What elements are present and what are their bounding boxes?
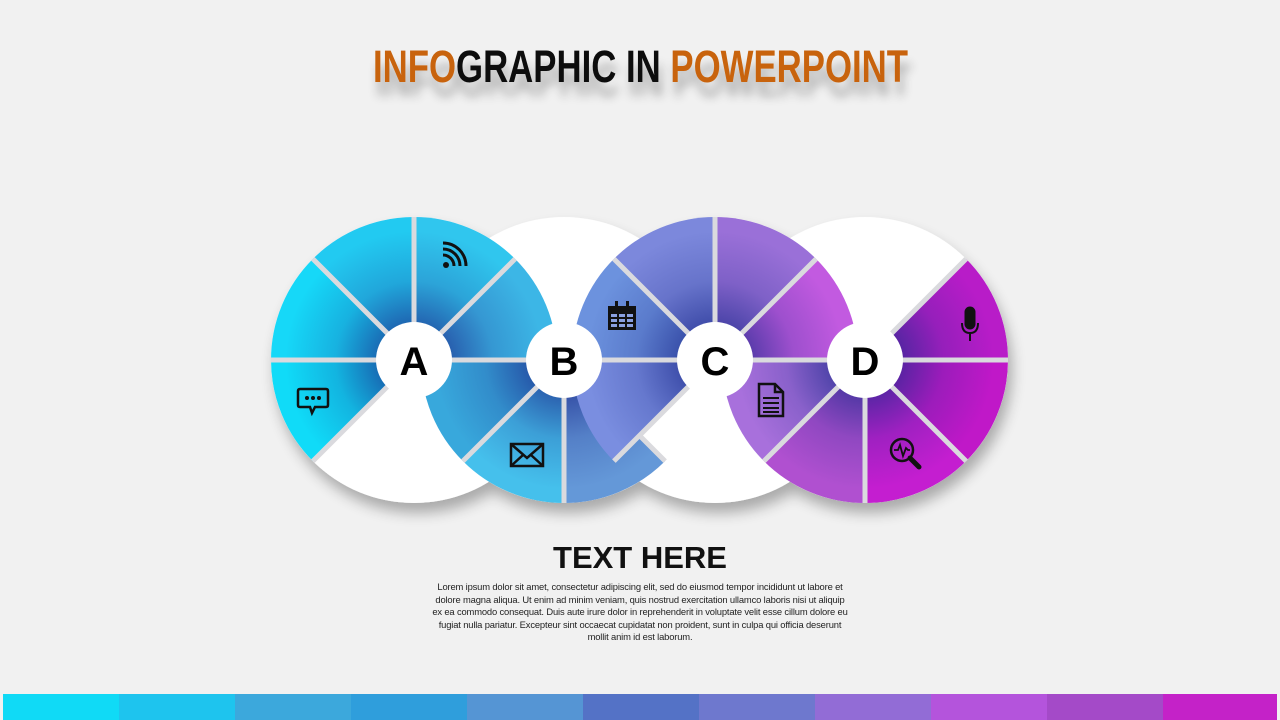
label A: A bbox=[400, 340, 428, 384]
circle C wedges bbox=[572, 217, 858, 461]
label D bbox=[827, 322, 903, 398]
title: INFOGRAPHIC IN POWERPOINT bbox=[373, 41, 908, 92]
label C bbox=[677, 322, 753, 398]
icon: calendar bbox=[608, 301, 636, 330]
icon: chat bbox=[298, 389, 328, 413]
icon: envelope bbox=[511, 444, 543, 466]
center labels bbox=[376, 322, 903, 398]
circle D wedges bbox=[722, 259, 1008, 503]
heading: text here: TEXT HERE bbox=[553, 540, 727, 575]
icon: search bbox=[891, 439, 919, 467]
icon: document bbox=[759, 384, 783, 416]
icon: microphone bbox=[962, 307, 978, 341]
icon: rss bbox=[443, 243, 466, 268]
body text: Lorem ipsum dolor sit amet, consectetur adipiscing elit, sed do eiusmod tempor incididunt ut labore et dolore magna aliqua. Ut enim ad minim veniam, quis nostrud exercitation ullamco laboris nisi ut aliquip ex ea commodo consequat. Duis aute irure dolor in reprehenderit in voluptate velit esse cillum dolore eu fugiat nulla pariatur. Excepteur sint occaecat cupidatat non proident, sunt in culpa qui officia deserunt mollit anim id est laborum. bbox=[432, 581, 848, 642]
circle A wedges bbox=[271, 217, 557, 461]
white base circles bbox=[271, 217, 1008, 503]
label A bbox=[376, 322, 452, 398]
bottom color bar bbox=[3, 694, 1277, 720]
label B: B bbox=[550, 340, 578, 384]
label B bbox=[526, 322, 602, 398]
label D: D bbox=[851, 340, 879, 384]
circle B wedges bbox=[421, 360, 665, 503]
label C: C bbox=[701, 340, 729, 384]
